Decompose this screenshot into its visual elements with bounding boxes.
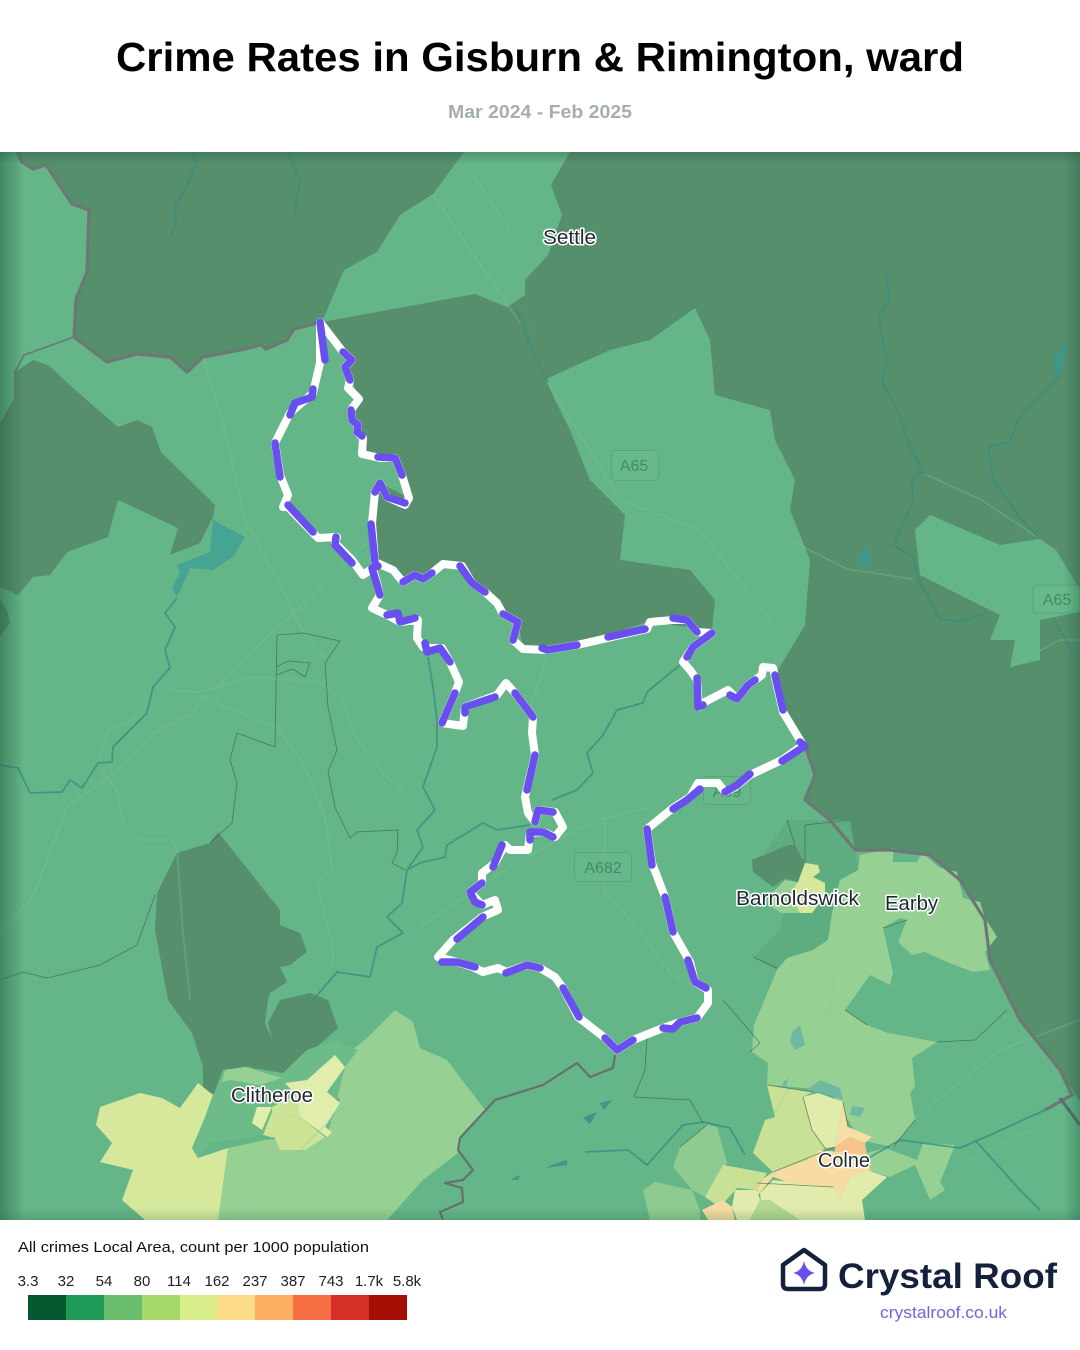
map edge vignette <box>0 152 1080 1220</box>
map area: Colne orange ward <box>835 1103 872 1147</box>
logo: Crystal Roof <box>783 1250 1057 1322</box>
map area: Barnoldswick medium ward <box>769 820 857 970</box>
legend value labels: 114 <box>167 1273 191 1290</box>
map area: central dark zone <box>322 294 715 649</box>
legend <box>18 1239 422 1320</box>
map area: Colne lower pale <box>760 1170 887 1220</box>
map area: Colne pale ward <box>803 1093 843 1148</box>
county border <box>0 152 1080 1125</box>
map area: Nelson south green <box>643 1182 700 1220</box>
map area: Clitheroe south ward <box>263 1112 325 1150</box>
map area: Clitheroe small ward <box>252 1107 272 1130</box>
legend value labels: 54 <box>96 1273 112 1290</box>
map area: top dark zone <box>17 152 464 372</box>
map area: Clitheroe middle ward <box>272 1095 300 1117</box>
ward boundary lines <box>0 633 1007 1187</box>
map area: Nelson yellow <box>705 1165 767 1207</box>
map area: eastern dark zone <box>525 152 1080 1102</box>
road label: A65 east <box>1033 585 1080 613</box>
map area: far-east light patch <box>915 515 1080 667</box>
map area: southern dark zone <box>155 832 307 1095</box>
map area: Barnoldswick light ward <box>773 880 800 913</box>
road label: A65 <box>612 450 658 480</box>
map area: Nelson mid green <box>750 1200 800 1220</box>
map area: Colne reservoirs <box>781 1025 865 1117</box>
road label: A682 <box>574 852 632 882</box>
map area: Clitheroe centre <box>192 1040 358 1158</box>
small reservoirs <box>511 339 1067 1180</box>
place label: Settle: Settle <box>543 227 596 249</box>
road label: A59 <box>704 776 750 804</box>
map area: Colne east light <box>867 1143 955 1200</box>
logo wordmark: Crystal Roof <box>838 1257 1057 1296</box>
legend value labels: 237 <box>242 1273 268 1290</box>
place label: Earby: Earby <box>885 893 938 915</box>
map area: Nelson orange <box>702 1200 735 1220</box>
map area: western dark zone <box>0 360 215 595</box>
Stocks reservoir <box>172 520 245 597</box>
subtitle: date range: Mar 2024 - Feb 2025 <box>448 102 632 122</box>
map area: Colne north light <box>767 1008 937 1147</box>
legend value labels: 3.3 <box>18 1273 38 1290</box>
rivers and reservoirs <box>0 152 1073 1210</box>
road label: A65: A65 <box>620 458 648 475</box>
map area: Colne lower orange <box>757 1150 870 1198</box>
legend value labels: 5.8k <box>393 1273 422 1290</box>
road label: A682: A682 <box>584 860 622 877</box>
roads <box>176 306 1080 1150</box>
ward outline: white base <box>275 322 803 1050</box>
legend value labels: 32 <box>58 1273 74 1290</box>
place label: Barnoldswick: Barnoldswick <box>736 888 860 910</box>
logo url: crystalroof.co.uk <box>880 1304 1008 1322</box>
legend colour scale <box>28 1295 407 1320</box>
map area: Clitheroe large ward <box>218 1010 485 1220</box>
legend value labels: 162 <box>204 1273 230 1290</box>
map area: Barnoldswick dark ward <box>752 845 805 887</box>
map area: Clitheroe west ward <box>96 1083 228 1220</box>
choropleth map <box>0 152 1080 1220</box>
map area: west-edge dark sliver <box>0 598 10 637</box>
map area: Barnoldswick yellow ward <box>790 863 825 913</box>
legend value labels: 1.7k <box>355 1273 384 1290</box>
legend title: All crimes Local Area, count per 1000 population <box>18 1239 369 1256</box>
place label: Clitheroe: Clitheroe <box>231 1085 313 1107</box>
icon: house with star <box>783 1250 825 1289</box>
district border <box>440 1055 615 1220</box>
map area: Clitheroe inner light <box>222 1067 282 1085</box>
map area: Earby and Salterforth light <box>752 848 997 1063</box>
ward outline: purple dashes <box>275 322 805 1050</box>
place label: Colne: Colne <box>818 1150 870 1172</box>
map area: Colne centre orange <box>835 1137 867 1155</box>
map area: Nelson pale <box>732 1190 760 1220</box>
place labels <box>231 227 938 1172</box>
title: Crime Rates in Gisburn & Rimington, ward <box>116 34 964 80</box>
legend value labels: 387 <box>280 1273 306 1290</box>
map area: Clitheroe north dark ward <box>245 993 338 1077</box>
legend value labels: 80 <box>134 1273 150 1290</box>
map area: Clitheroe east ward <box>285 1055 345 1137</box>
road label: A59: A59 <box>713 784 741 801</box>
legend value labels <box>18 1273 422 1290</box>
map area: Colne yellow-green <box>753 1085 825 1172</box>
legend value labels: 743 <box>318 1273 344 1290</box>
road label: A65 east: A65 <box>1043 592 1071 609</box>
map area: Nelson green <box>673 1125 727 1197</box>
ward outline: Gisburn & Rimington <box>275 322 805 1050</box>
